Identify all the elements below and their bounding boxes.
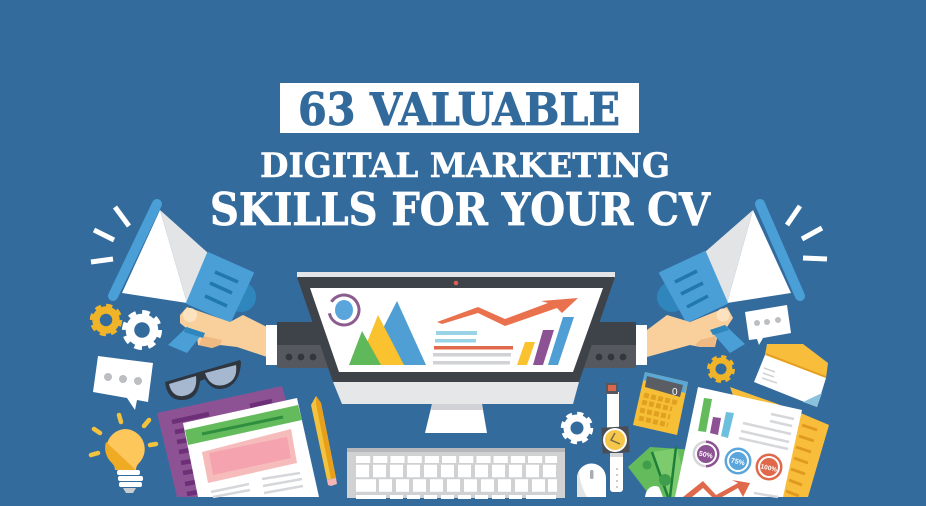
report sheet with charts: [675, 387, 802, 497]
icon: envelope: [754, 344, 828, 407]
sheet text lines: [739, 414, 794, 449]
icon: white gear right: [563, 414, 591, 442]
sheet bar chart: [698, 398, 734, 438]
icon: right sound rays: [787, 206, 827, 259]
icon: banknotes: [628, 447, 695, 497]
progress circle 50%: 50%: [698, 451, 714, 461]
left megaphone with hand: [113, 204, 277, 365]
icon: yellow gear right: [709, 357, 733, 381]
right megaphone with hand: [636, 204, 800, 365]
left sleeve: [277, 322, 338, 368]
monitor: [297, 272, 615, 433]
keyboard: [347, 448, 565, 498]
icon: yellow gear left: [92, 306, 120, 334]
title block: [210, 83, 711, 236]
chart: ring and circle: [325, 291, 363, 329]
yellow folder: [730, 387, 829, 497]
icon: wristwatch: [601, 383, 630, 492]
icon: left sound rays: [91, 207, 129, 262]
icon: left speech bubble: [93, 356, 153, 410]
sheet trend arrow: [683, 480, 750, 497]
white document with green header: [183, 398, 319, 497]
title block: 63 VALUABLE: [298, 83, 620, 136]
icon: light bulb: [91, 415, 156, 493]
icon: white gear left: [124, 312, 160, 348]
purple document: [157, 386, 318, 497]
text lines on screen: [433, 331, 513, 364]
title block: DIGITAL MARKETING: [260, 146, 670, 186]
chart: triangles: [349, 301, 426, 365]
icon: right speech bubble: [745, 305, 791, 345]
icon: pencil: [311, 396, 337, 486]
icon: calculator: [633, 372, 688, 435]
icon: calculator: 0: [672, 387, 678, 398]
chart: rising bars: [517, 317, 574, 365]
progress circle 75%: 75%: [730, 458, 746, 468]
icon: mouse: [577, 464, 606, 497]
title block: SKILLS FOR YOUR CV: [210, 183, 711, 236]
chart: trend arrow: [437, 298, 578, 326]
progress circle 100%: 100%: [760, 463, 778, 474]
icon: glasses: [165, 360, 241, 400]
right sleeve: [574, 322, 636, 368]
